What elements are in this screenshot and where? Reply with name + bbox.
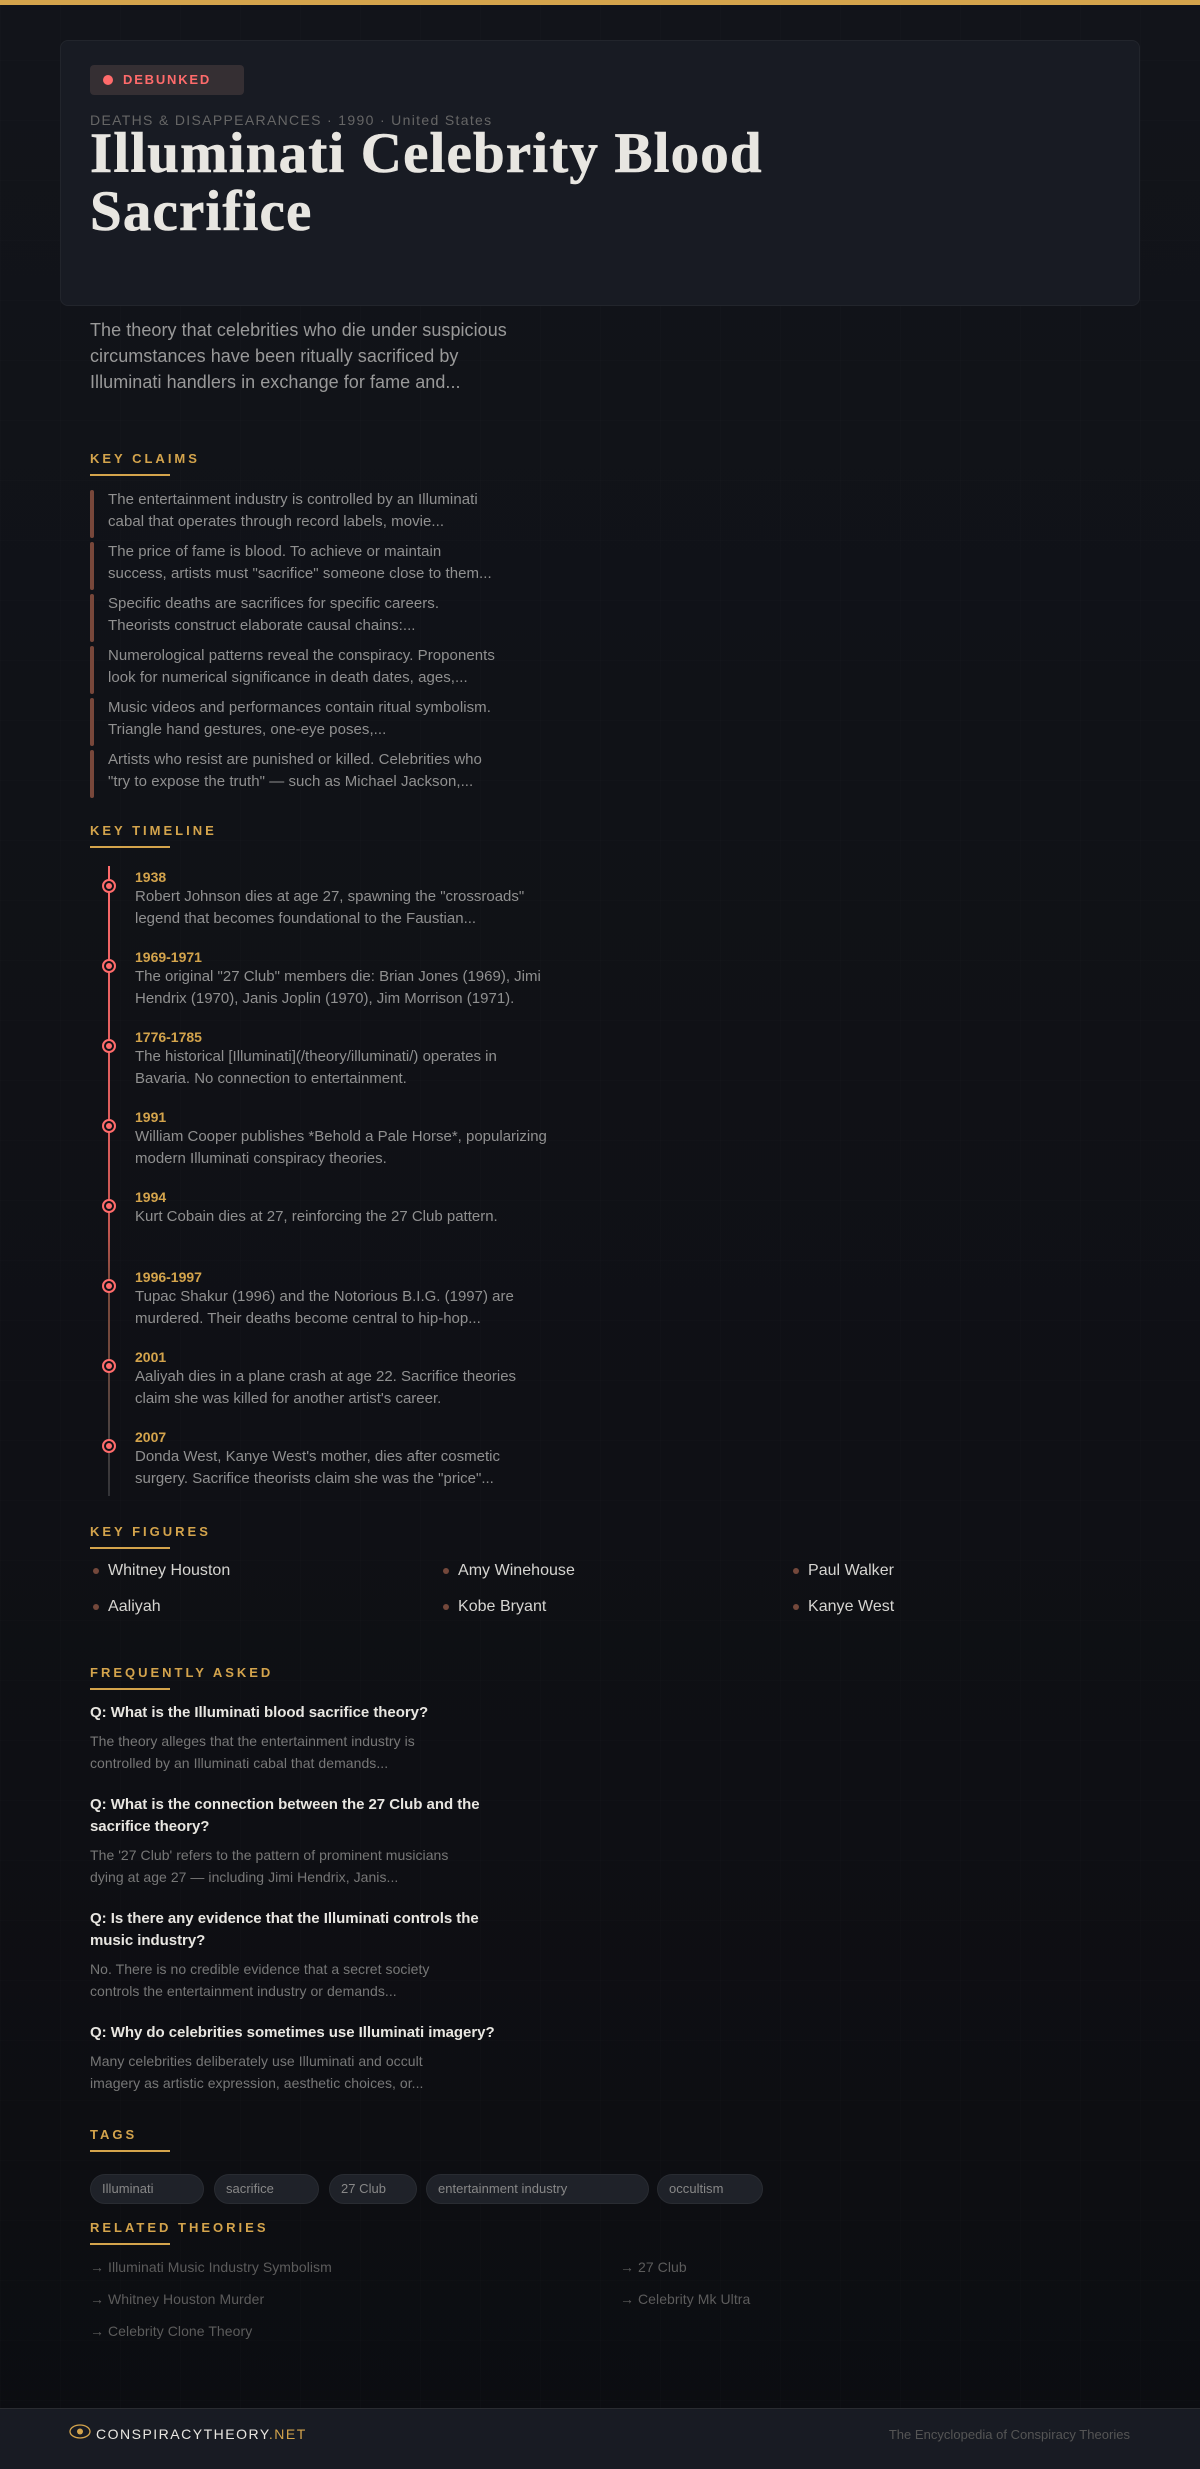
tag: occultism: occultism bbox=[669, 2181, 723, 2196]
figure: Whitney Houston: Whitney Houston bbox=[108, 1562, 230, 1579]
claim 2: success, artists must "sacrifice" someone close to them... bbox=[108, 565, 492, 582]
FAQ 4: Q: Why do celebrities sometimes use Illuminati imagery? bbox=[90, 2024, 495, 2041]
claim 4 bbox=[90, 646, 495, 694]
FAQ 2: sacrifice theory? bbox=[90, 1818, 209, 1835]
icon: eye logo bbox=[69, 2424, 91, 2439]
event 1776-1785: The historical [Illuminati](/theory/illuminati/) operates in bbox=[135, 1048, 497, 1065]
intro summary text: Illuminati handlers in exchange for fame and... bbox=[90, 372, 461, 392]
event 1969-1971: Hendrix (1970), Janis Joplin (1970), Jim Morrison (1971). bbox=[135, 990, 514, 1007]
link: Whitney Houston Murder: → Whitney Houston Murder bbox=[90, 2291, 264, 2307]
icon: status dot bbox=[103, 75, 113, 85]
claim 3: Specific deaths are sacrifices for specific careers. bbox=[108, 595, 439, 612]
claim 1: cabal that operates through record labels, movie... bbox=[108, 513, 444, 530]
claim 6: Artists who resist are punished or killed. Celebrities who bbox=[108, 751, 482, 768]
panel: FAQ list bbox=[90, 1704, 495, 2091]
FAQ 1: The theory alleges that the entertainment industry is bbox=[90, 1733, 415, 1749]
event 2001 bbox=[102, 1349, 516, 1407]
FAQ 4: Many celebrities deliberately use Illuminati and occult bbox=[90, 2053, 423, 2069]
event 1938 bbox=[102, 869, 524, 927]
panel: key claims list bbox=[90, 490, 495, 798]
event 1776-1785: 1776-1785 bbox=[135, 1029, 202, 1045]
tag: Illuminati bbox=[90, 2174, 204, 2204]
claim 5: Triangle hand gestures, one-eye poses,... bbox=[108, 721, 386, 738]
FAQ 2: Q: What is the connection between the 27 Club and the bbox=[90, 1796, 480, 1813]
claim 3 bbox=[90, 594, 439, 642]
FAQ 1: controlled by an Illuminati cabal that demands... bbox=[90, 1755, 388, 1771]
panel: hero header bbox=[60, 40, 1140, 306]
tag: 27 Club: 27 Club bbox=[341, 2181, 386, 2196]
title bbox=[90, 122, 763, 243]
event 2001: 2001 bbox=[135, 1349, 166, 1365]
tag: sacrifice: sacrifice bbox=[226, 2181, 274, 2196]
intro summary text: circumstances have been ritually sacrificed by bbox=[90, 346, 458, 366]
claim 2 bbox=[90, 542, 492, 590]
claim 6 bbox=[90, 750, 482, 798]
badge label: DEBUNKED bbox=[123, 72, 211, 87]
FAQ 2: dying at age 27 — including Jimi Hendrix, Janis... bbox=[90, 1869, 398, 1885]
claim 6: "try to expose the truth" — such as Michael Jackson,... bbox=[108, 773, 473, 790]
intro summary text: The theory that celebrities who die under suspicious bbox=[90, 320, 507, 340]
event 2001: claim she was killed for another artist's career. bbox=[135, 1390, 441, 1407]
heading: key claims: KEY CLAIMS bbox=[90, 451, 200, 466]
figure: Kanye West: Kanye West bbox=[808, 1598, 894, 1615]
claim 3: Theorists construct elaborate causal chains:... bbox=[108, 617, 416, 634]
tag: 27 Club bbox=[329, 2174, 417, 2204]
heading: key figures: KEY FIGURES bbox=[90, 1524, 211, 1539]
heading: tags: TAGS bbox=[90, 2127, 137, 2142]
event 2001: Aaliyah dies in a plane crash at age 22. Sacrifice theories bbox=[135, 1368, 516, 1385]
event 1938: Robert Johnson dies at age 27, spawning the "crossroads" bbox=[135, 888, 524, 905]
FAQ 3: music industry? bbox=[90, 1932, 205, 1949]
event 1991: William Cooper publishes *Behold a Pale Horse*, popularizing bbox=[135, 1128, 547, 1145]
event 1991: modern Illuminati conspiracy theories. bbox=[135, 1150, 387, 1167]
event 1994 bbox=[102, 1189, 498, 1225]
event 2007: surgery. Sacrifice theorists claim she was the "price"... bbox=[135, 1470, 494, 1487]
event 1776-1785 bbox=[102, 1029, 497, 1087]
event 1969-1971: 1969-1971 bbox=[135, 949, 202, 965]
event 1996-1997 bbox=[102, 1269, 514, 1327]
claim 1 bbox=[90, 490, 478, 538]
FAQ 4 bbox=[90, 2024, 495, 2091]
event 1991 bbox=[102, 1109, 547, 1167]
FAQ 4: imagery as artistic expression, aesthetic choices, or... bbox=[90, 2075, 424, 2091]
tag: sacrifice bbox=[214, 2174, 319, 2204]
FAQ 1 bbox=[90, 1704, 428, 1771]
FAQ 3: controls the entertainment industry or demands... bbox=[90, 1983, 397, 1999]
event 1776-1785: Bavaria. No connection to entertainment. bbox=[135, 1070, 407, 1087]
event 1996-1997: 1996-1997 bbox=[135, 1269, 202, 1285]
event 1991: 1991 bbox=[135, 1109, 166, 1125]
heading: key timeline: KEY TIMELINE bbox=[90, 823, 217, 838]
figure: Kobe Bryant: Kobe Bryant bbox=[458, 1598, 546, 1615]
category and date meta line: DEATHS & DISAPPEARANCES · 1990 · United States bbox=[90, 112, 492, 128]
heading: frequently asked: FREQUENTLY ASKED bbox=[90, 1665, 273, 1680]
event 1938: legend that becomes foundational to the Faustian... bbox=[135, 910, 476, 927]
footer bbox=[0, 2408, 1200, 2469]
link: Illuminati Music Industry Symbolism: → Illuminati Music Industry Symbolism bbox=[90, 2259, 332, 2275]
claim 1: The entertainment industry is controlled by an Illuminati bbox=[108, 491, 478, 508]
tag: Illuminati: Illuminati bbox=[102, 2181, 154, 2196]
event 1996-1997: murdered. Their deaths become central to hip-hop... bbox=[135, 1310, 481, 1327]
link: 27 Club: → 27 Club bbox=[620, 2259, 687, 2275]
top accent bar bbox=[0, 0, 1200, 5]
event 1994: 1994 bbox=[135, 1189, 166, 1205]
tag: entertainment industry bbox=[426, 2174, 649, 2204]
event 1994: Kurt Cobain dies at 27, reinforcing the 27 Club pattern. bbox=[135, 1208, 498, 1225]
intro summary text bbox=[90, 320, 507, 392]
claim 5: Music videos and performances contain ritual symbolism. bbox=[108, 699, 491, 716]
timeline axis line bbox=[108, 866, 110, 1496]
claim 4: look for numerical significance in death dates, ages,... bbox=[108, 669, 468, 686]
FAQ 3: No. There is no credible evidence that a secret society bbox=[90, 1961, 429, 1977]
footer tagline: The Encyclopedia of Conspiracy Theories bbox=[889, 2427, 1130, 2442]
claim 5 bbox=[90, 698, 491, 746]
panel: related theories links bbox=[90, 2259, 750, 2339]
panel: key figures list bbox=[93, 1562, 894, 1615]
event 2007: 2007 bbox=[135, 1429, 166, 1445]
figure: Amy Winehouse: Amy Winehouse bbox=[458, 1562, 575, 1579]
FAQ 3 bbox=[90, 1910, 479, 1999]
link: Celebrity Clone Theory: → Celebrity Clone Theory bbox=[90, 2323, 252, 2339]
badge: debunked status bbox=[90, 65, 244, 95]
event 2007 bbox=[102, 1429, 500, 1487]
heading: related theories: RELATED THEORIES bbox=[90, 2220, 268, 2235]
event 1969-1971: The original "27 Club" members die: Brian Jones (1969), Jimi bbox=[135, 968, 541, 985]
event 1938: 1938 bbox=[135, 869, 166, 885]
tag: entertainment industry: entertainment industry bbox=[438, 2181, 567, 2196]
figure: Aaliyah: Aaliyah bbox=[108, 1598, 161, 1615]
event 2007: Donda West, Kanye West's mother, dies after cosmetic bbox=[135, 1448, 500, 1465]
FAQ 1: Q: What is the Illuminati blood sacrifice theory? bbox=[90, 1704, 428, 1721]
FAQ 3: Q: Is there any evidence that the Illuminati controls the bbox=[90, 1910, 479, 1927]
tag: occultism bbox=[657, 2174, 763, 2204]
event 1996-1997: Tupac Shakur (1996) and the Notorious B.I.G. (1997) are bbox=[135, 1288, 514, 1305]
claim 4: Numerological patterns reveal the conspiracy. Proponents bbox=[108, 647, 495, 664]
chart: vertical timeline bbox=[102, 866, 547, 1496]
FAQ 2: The '27 Club' refers to the pattern of prominent musicians bbox=[90, 1847, 448, 1863]
claim 2: The price of fame is blood. To achieve or maintain bbox=[108, 543, 441, 560]
title: Illuminati Celebrity Blood bbox=[90, 122, 763, 185]
logo wordmark: CONSPIRACYTHEORY.NET bbox=[96, 2426, 307, 2442]
link: Celebrity Mk Ultra: → Celebrity Mk Ultra bbox=[620, 2291, 750, 2307]
title: Sacrifice bbox=[90, 180, 312, 243]
event 1969-1971 bbox=[102, 949, 541, 1007]
FAQ 2 bbox=[90, 1796, 480, 1885]
figure: Paul Walker: Paul Walker bbox=[808, 1562, 894, 1579]
